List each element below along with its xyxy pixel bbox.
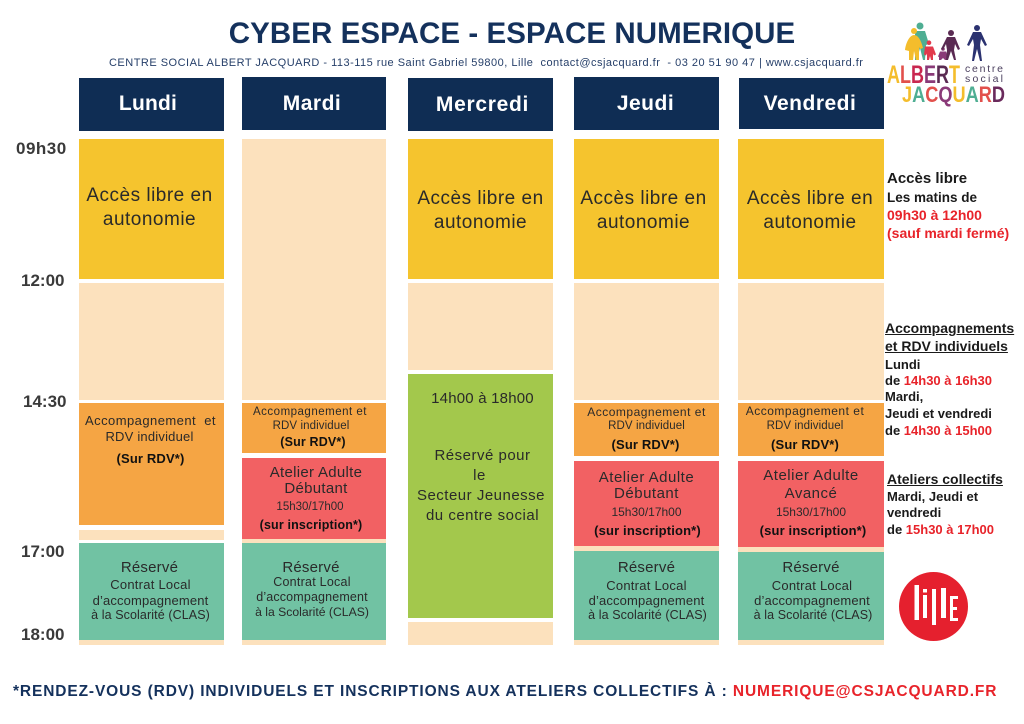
block: réservé CLAS: à la Scolarité (CLAS) — [91, 608, 210, 622]
side note: accompagnements: Mardi, — [885, 389, 923, 404]
block: réservé CLAS: à la Scolarité (CLAS) — [754, 608, 872, 622]
block: réservé CLAS: à la Scolarité (CLAS) — [588, 608, 707, 622]
time labels: 18:00 — [21, 625, 64, 644]
block: accès libre: Accès libre en — [747, 188, 873, 209]
block: atelier: (sur inscription*) — [760, 523, 866, 538]
block: accompagnement: RDV individuel — [273, 420, 349, 432]
block: atelier: Atelier Adulte — [763, 467, 859, 484]
block: accès libre — [574, 139, 719, 279]
day header: Jeudi: Jeudi — [617, 92, 674, 115]
side note: accès libre: 09h30 à 12h00 — [887, 207, 982, 223]
block: réservé CLAS: Réservé — [282, 559, 340, 576]
time labels — [16, 139, 67, 644]
block: atelier: (sur inscription*) — [260, 518, 362, 532]
block: réservé CLAS: d’accompagnement — [589, 593, 704, 608]
column: Mercredi — [408, 139, 553, 645]
block: secteur jeunesse: Réservé pour — [434, 447, 531, 464]
block: réservé CLAS: Contrat Local — [772, 578, 852, 593]
block: accès libre: Accès libre en — [417, 188, 544, 209]
block: secteur jeunesse: le — [473, 467, 486, 484]
block: réservé CLAS — [242, 543, 386, 640]
logo wordmark — [887, 61, 1005, 107]
logo wordmark: centre — [965, 63, 1003, 75]
logo: Lille — [899, 572, 968, 641]
time labels: 14:30 — [23, 392, 66, 411]
side note: ateliers collectifs: de 15h30 à 17h00 — [887, 522, 994, 537]
block: réservé CLAS — [738, 552, 884, 640]
day header: Vendredi — [739, 78, 884, 129]
side note: accompagnements: de 14h30 à 16h30 — [885, 373, 992, 388]
block: atelier: 15h30/17h00 — [276, 501, 344, 513]
block: accompagnement: RDV individuel — [105, 429, 194, 444]
side note: accès libre: Les matins de — [887, 190, 977, 205]
block: réservé CLAS: Réservé — [121, 559, 178, 576]
block: secteur jeunesse: 14h00 à 18h00 — [431, 390, 534, 407]
block: accompagnement: RDV individuel — [608, 420, 685, 432]
block: atelier: Atelier Adulte — [270, 464, 362, 481]
logo wordmark: JACQUARD — [902, 82, 1005, 107]
block: atelier: Avancé — [785, 485, 837, 502]
title: CYBER ESPACE - ESPACE NUMERIQUE — [229, 17, 795, 50]
block: secteur jeunesse — [408, 374, 553, 618]
time labels: 09h30 — [16, 139, 67, 158]
side note: ateliers collectifs: Ateliers collectifs — [887, 471, 1003, 487]
block: atelier: 15h30/17h00 — [776, 505, 846, 519]
block: accompagnement: (Sur RDV*) — [280, 435, 346, 449]
block: atelier: Atelier Adulte — [599, 469, 694, 486]
time labels: 17:00 — [21, 542, 64, 561]
block: accès libre: autonomie — [763, 212, 857, 233]
day header: Mercredi — [408, 78, 553, 131]
block: accès libre: autonomie — [597, 212, 690, 233]
block: accompagnement — [242, 403, 386, 453]
block: atelier: Débutant — [284, 480, 348, 497]
block: accompagnement: (Sur RDV*) — [117, 451, 184, 466]
side note: accompagnements: de 14h30 à 15h00 — [885, 423, 992, 438]
side note: accompagnements: Lundi — [885, 357, 920, 372]
time labels: 12:00 — [21, 271, 64, 290]
block: réservé CLAS: Contrat Local — [110, 577, 191, 592]
column: Mardi — [242, 139, 386, 645]
block: accès libre — [408, 139, 553, 279]
block: réservé CLAS: Contrat Local — [273, 575, 351, 589]
day header: Lundi — [79, 78, 224, 131]
side note: accompagnements: et RDV individuels — [885, 338, 1008, 354]
block: accompagnement — [79, 403, 224, 525]
block: atelier — [242, 458, 386, 539]
column: Jeudi — [574, 139, 719, 645]
block: accompagnement: Accompagnement et — [746, 404, 864, 418]
block: réservé CLAS — [574, 551, 719, 640]
block: accompagnement: (Sur RDV*) — [612, 437, 679, 452]
block: accompagnement — [738, 403, 884, 456]
block: réservé CLAS — [79, 543, 224, 640]
day header: Vendredi: Vendredi — [764, 92, 856, 115]
block: secteur jeunesse: du centre social — [426, 507, 539, 524]
footer call to action: *RENDEZ-VOUS (RDV) INDIVIDUELS ET INSCRIPTIONS AUX ATELIERS COLLECTIFS À : NUMERIQUE@CSJACQUARD.FR — [13, 683, 997, 700]
day header: Lundi: Lundi — [119, 92, 177, 115]
block: accompagnement: Accompagnement et — [253, 406, 367, 418]
block: accès libre: autonomie — [434, 212, 527, 233]
block: atelier — [574, 461, 719, 546]
logo wordmark: ALBERT — [887, 61, 960, 89]
block: accompagnement: (Sur RDV*) — [771, 437, 839, 452]
block: accès libre: autonomie — [103, 209, 196, 230]
column: Lundi — [79, 139, 224, 645]
contact line: CENTRE SOCIAL ALBERT JACQUARD - 113-115 rue Saint Gabriel 59800, Lille contact@csjacquard.fr - 03 20 51 90 47 | www.csjacquard.fr — [109, 57, 863, 69]
icon: family figures — [905, 22, 987, 61]
block: réservé CLAS: Contrat Local — [606, 578, 687, 593]
side note: accompagnements: Jeudi et vendredi — [885, 406, 992, 421]
side note: accompagnements: Accompagnements — [885, 320, 1014, 336]
block: réservé CLAS: Réservé — [782, 559, 840, 576]
side note: accès libre: Accès libre — [887, 170, 967, 187]
block: atelier — [738, 461, 884, 547]
block: accès libre: Accès libre en — [86, 185, 213, 206]
logo wordmark: social — [965, 73, 1003, 85]
side note: ateliers collectifs: Mardi, Jeudi et — [887, 489, 978, 504]
day header: Mardi: Mardi — [283, 92, 341, 115]
side note: accès libre — [887, 170, 1009, 241]
block: accès libre — [79, 139, 224, 279]
block: accompagnement: Accompagnement et — [587, 405, 706, 419]
block: accès libre — [738, 139, 884, 279]
column: Vendredi — [738, 139, 884, 645]
day header: Mardi — [242, 77, 386, 130]
block: accès libre: Accès libre en — [580, 188, 707, 209]
block: réservé CLAS: à la Scolarité (CLAS) — [255, 605, 369, 619]
block: réservé CLAS: Réservé — [618, 559, 675, 576]
day header: Mercredi: Mercredi — [436, 93, 529, 116]
block: réservé CLAS: d’accompagnement — [256, 590, 368, 604]
block: secteur jeunesse: Secteur Jeunesse — [417, 487, 545, 504]
block: accompagnement: Accompagnement et — [85, 413, 216, 428]
block: réservé CLAS: d’accompagnement — [93, 593, 208, 608]
block: atelier: Débutant — [614, 485, 679, 502]
block: atelier: (sur inscription*) — [594, 523, 701, 538]
block: accompagnement — [574, 403, 719, 456]
side note: ateliers collectifs: vendredi — [887, 505, 941, 520]
logo: Albert Jacquard — [887, 22, 1005, 107]
side note: ateliers collectifs — [887, 471, 1003, 537]
block: accompagnement: RDV individuel — [767, 420, 843, 432]
day header: Jeudi — [574, 77, 719, 130]
side note: accompagnements — [885, 320, 1014, 438]
side note: accès libre: (sauf mardi fermé) — [887, 225, 1009, 241]
block: réservé CLAS: d’accompagnement — [754, 593, 870, 608]
block: atelier: 15h30/17h00 — [611, 505, 682, 519]
